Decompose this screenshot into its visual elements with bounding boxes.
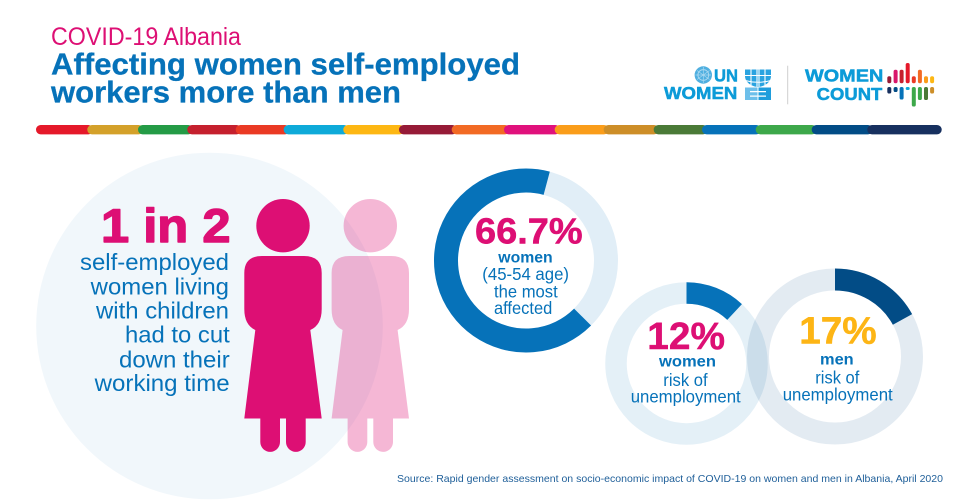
description text: self-employed [80, 249, 229, 275]
donut chart: 66.7% women 45-54 [446, 180, 606, 341]
panel: 1 in 2 text [80, 199, 230, 396]
description text: down their [119, 346, 230, 372]
stat: 17%: 17% [799, 310, 877, 352]
stat: 12%: 12% [647, 316, 725, 358]
description text: women living [90, 273, 229, 299]
logo: UN Women: UN [714, 66, 738, 86]
stat: 1 in 2: 1 in 2 [101, 199, 230, 252]
logo: UN Women: WOMEN [664, 83, 737, 103]
rainbow SDG colour bar [36, 125, 942, 134]
stat: 66.7%: 66.7% [475, 210, 583, 251]
label: men risk of unemployment: risk of [815, 368, 859, 388]
label: women risk of unemployment: women [658, 354, 716, 371]
panel: 1 in 2 background circle [36, 153, 383, 499]
label: women (45-54 age) the most affected: affected [494, 298, 552, 318]
logo: Women Count: WOMEN [805, 65, 883, 85]
description text: working time [94, 370, 230, 396]
source note: Source: Rapid gender assessment on socio-economic impact of COVID-19 on women and men in Albania, April 2020 [397, 473, 943, 485]
logo divider [787, 66, 788, 104]
description text: with children [95, 298, 229, 324]
icon: UN Women symbol [745, 70, 771, 100]
donut chart: 17% men [758, 280, 912, 434]
subtitle: COVID-19 Albania: COVID-19 Albania [51, 23, 241, 51]
icon: woman figure faded [332, 199, 409, 452]
heading line 1: Affecting women self-employed [51, 46, 520, 81]
label: women risk of unemployment: unemployment [631, 387, 741, 407]
logo: UN Women [664, 66, 771, 103]
icon: woman figure solid [244, 199, 322, 452]
label: women risk of unemployment: risk of [663, 370, 708, 390]
label: women (45-54 age) the most affected: women [497, 250, 553, 267]
label: women (45-54 age) the most affected: the most [494, 281, 558, 301]
label: women (45-54 age) the most affected: (45-54 age) [482, 264, 569, 284]
logo: Women Count: COUNT [817, 84, 883, 104]
icon: multicolour bars [887, 63, 934, 106]
icon: UN emblem [695, 66, 712, 84]
description text: had to cut [125, 322, 230, 348]
label: women (45-54 age) the most affected [482, 250, 569, 318]
label: men risk of unemployment: unemployment [783, 384, 893, 404]
title block [50, 23, 520, 110]
description text [80, 249, 230, 396]
label: men risk of unemployment: men [820, 351, 854, 368]
heading line 2: workers more than men [50, 75, 401, 110]
logo: Women Count [805, 63, 934, 106]
label: men risk of unemployment [783, 351, 893, 404]
label: women risk of unemployment [631, 354, 741, 407]
donut chart: 12% women [616, 293, 757, 434]
